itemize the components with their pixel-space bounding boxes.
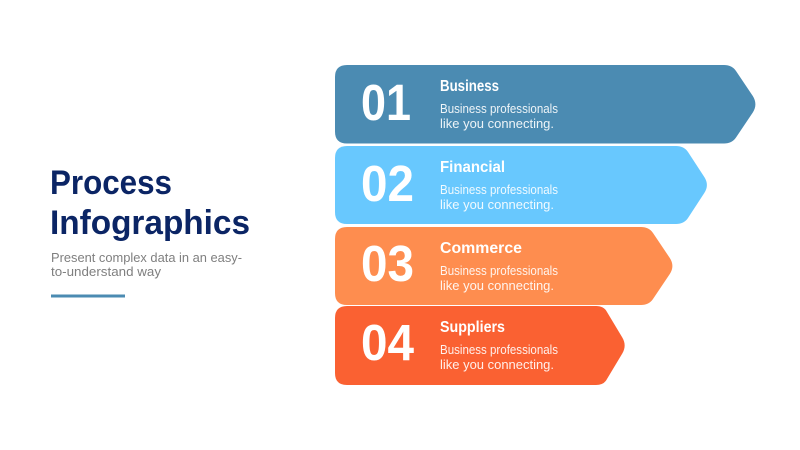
arrow shape 04 bbox=[335, 306, 625, 385]
panel: step 04 Suppliers bbox=[335, 306, 625, 385]
description 04 bbox=[440, 343, 558, 372]
description 02 bbox=[440, 183, 558, 212]
subtitle text bbox=[51, 250, 242, 279]
description 04: Business professionals bbox=[440, 343, 558, 357]
description 03 bbox=[440, 264, 558, 293]
accent line bbox=[51, 294, 125, 298]
panel: step 02 Financial bbox=[335, 146, 707, 224]
subtitle text: to-understand way bbox=[51, 264, 162, 279]
panel: step 03 Commerce bbox=[335, 227, 672, 305]
number 01: 01 bbox=[361, 74, 411, 131]
title bbox=[50, 164, 250, 242]
description 01 bbox=[440, 102, 558, 131]
heading Financial: Financial bbox=[440, 159, 505, 176]
arrow shape 03 bbox=[335, 227, 672, 305]
arrow shape 02 bbox=[335, 146, 707, 224]
arrow shape 01 bbox=[335, 65, 755, 144]
description 02: Business professionals bbox=[440, 183, 558, 197]
heading Commerce: Commerce bbox=[440, 240, 522, 257]
number 02: 02 bbox=[361, 155, 414, 212]
panel: step 01 Business bbox=[335, 65, 755, 144]
number 03: 03 bbox=[361, 235, 414, 292]
description 03: Business professionals bbox=[440, 264, 558, 278]
title: Infographics bbox=[50, 204, 250, 242]
subtitle text: Present complex data in an easy- bbox=[51, 250, 242, 265]
heading Business: Business bbox=[440, 78, 499, 95]
number 04: 04 bbox=[361, 314, 415, 371]
description 01: Business professionals bbox=[440, 102, 558, 116]
title: Process bbox=[50, 164, 172, 202]
description 01: like you connecting. bbox=[440, 117, 554, 131]
description 04: like you connecting. bbox=[440, 358, 554, 372]
description 03: like you connecting. bbox=[440, 279, 554, 293]
heading Suppliers: Suppliers bbox=[440, 319, 505, 336]
description 02: like you connecting. bbox=[440, 198, 554, 212]
